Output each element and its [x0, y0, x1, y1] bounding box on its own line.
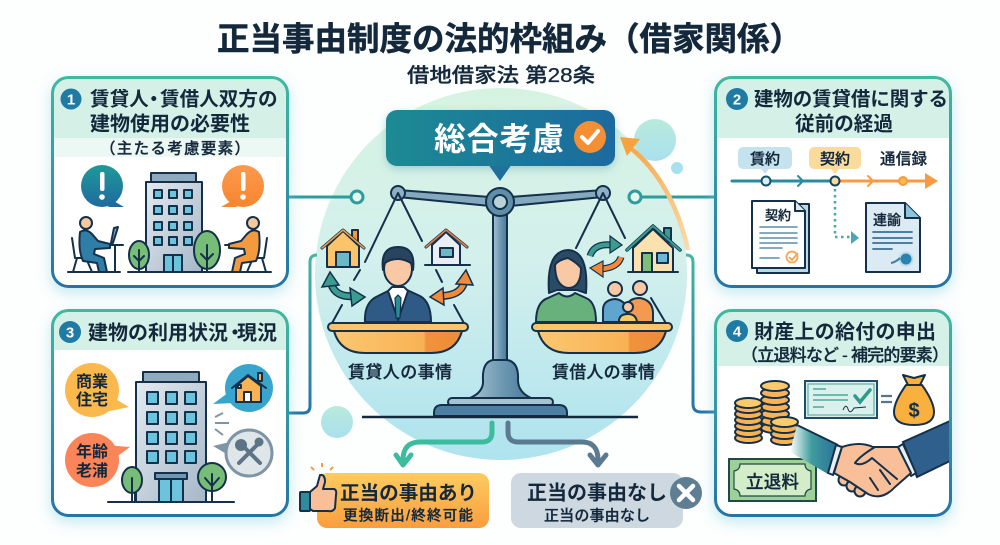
banner: comprehensive consideration [386, 110, 615, 181]
icon: white house [425, 230, 470, 265]
bubble: commercial and residential [65, 363, 129, 417]
icon: coin stacks [735, 381, 798, 445]
label: landlord circumstances: 賃貸人の事情 [348, 363, 452, 382]
arrow: green [590, 236, 622, 256]
icon: banknote: 立退料 [746, 472, 799, 492]
panel 3 heading: 建物の利用状況 [88, 322, 228, 344]
timeline tags: 賃約 [750, 151, 780, 168]
box: no legitimate reason [511, 473, 702, 528]
icon: trees [122, 463, 226, 502]
arrow: orange [590, 257, 621, 277]
timeline arrow [732, 173, 938, 189]
panel 2 heading: 従前の経過 [795, 114, 893, 136]
panel 1 heading: 賃貸人 [90, 88, 149, 110]
ground line [108, 501, 234, 503]
box: legitimate reason exists: 更換断出/終終可能 [343, 506, 474, 524]
bubble: commercial and residential: 住宅 [76, 390, 108, 409]
panel 1 heading [90, 88, 278, 136]
icon: contract document [752, 201, 809, 273]
icon: banknote [729, 459, 816, 501]
icon: orange speech bubble [221, 165, 264, 207]
document label: 連諭 [873, 212, 901, 228]
icon: family [603, 281, 653, 322]
icon: contract check [786, 252, 798, 262]
timeline tags [738, 147, 927, 174]
box: legitimate reason exists [300, 463, 489, 528]
equals sign [881, 396, 892, 402]
panel 1 subheading: （主たる考慮要素） [100, 140, 250, 158]
scale: beam [391, 186, 610, 216]
box: no legitimate reason: 正当の事由なし [544, 508, 650, 524]
icon: orange house [322, 230, 364, 267]
dotted branch arrow [835, 189, 859, 244]
icon: correspondence document [866, 203, 920, 272]
panel 1: necessity of use [51, 76, 289, 288]
badge 4: 4 [733, 324, 742, 340]
panel 2: history of lease [714, 76, 952, 288]
box: no legitimate reason: 正当の事由なし [527, 482, 667, 504]
pan bowl [532, 323, 672, 353]
icon: handshake [790, 421, 952, 496]
panel 3 heading: 現況 [237, 322, 277, 344]
icon: teal speech bubble [81, 165, 124, 207]
icon: landlord at desk [68, 217, 123, 272]
badge 3: 3 [66, 324, 74, 342]
icon: tenant at desk [225, 217, 271, 272]
bubble: tools icon [213, 430, 272, 476]
bubble: age and deterioration: 年齢 [76, 442, 108, 461]
banner: comprehensive consideration: 総合考慮 [434, 121, 564, 157]
panel 4 subheading: （立退料など - 補完的要素） [741, 346, 949, 365]
left pan: landlord [322, 230, 473, 382]
icon: thumbs up [300, 463, 336, 511]
arrow: outcome no [508, 423, 606, 465]
right pan: tenant [532, 226, 680, 382]
panel 1 heading: 建物使用の必要性 [90, 112, 250, 136]
panel 2 heading [754, 88, 948, 136]
background circle [315, 88, 687, 460]
bubble: house icon [213, 364, 273, 412]
connector: panel 2 to scale [629, 191, 714, 203]
timeline tags: 通信録 [880, 150, 927, 168]
icon: money bag [894, 375, 934, 425]
connector: panel 1 to scale [289, 191, 363, 203]
badge 2: 2 [733, 92, 741, 108]
arrow: curved orange to label [620, 137, 688, 250]
icon: money bag: $ [908, 400, 920, 422]
decorative bubbles [321, 119, 683, 438]
bubble: age and deterioration [65, 433, 130, 487]
icon: tenant woman [536, 250, 596, 322]
icon: building [136, 372, 206, 502]
document label: 契約 [765, 208, 791, 223]
icon: landlord [365, 247, 431, 322]
badge 1 [60, 88, 82, 110]
subtitle: 借地借家法 第28条 [407, 64, 595, 87]
connector: panel 3 to scale [289, 255, 317, 413]
box: legitimate reason exists: 正当の事由あり [340, 482, 477, 504]
panel 3: building usage [51, 309, 289, 517]
panel 4 heading: 財産上の給付の申出 [754, 320, 936, 344]
title: 正当事由制度の法的枠組み（借家関係） [217, 21, 802, 57]
badge 3 [59, 321, 81, 343]
bubble: age and deterioration: 老浦 [76, 461, 108, 480]
timeline tags: 契約 [820, 151, 850, 168]
bubble: commercial and residential: 商業 [76, 373, 108, 391]
icon: seal [891, 252, 912, 266]
icon: cross [670, 477, 702, 509]
ground line [128, 271, 233, 273]
panel 4: financial offer [714, 309, 952, 517]
motion dashes [215, 413, 229, 435]
badge 1: 1 [67, 92, 75, 108]
scale: strings [331, 193, 667, 325]
arrow: outcome yes [396, 423, 492, 465]
panel 1 heading: 賃借人双方の [160, 88, 278, 110]
panel 1 heading: ・ [144, 88, 164, 110]
badge 4 [726, 320, 748, 342]
arrows: green exchange [322, 272, 365, 306]
icon: green-roof house [627, 226, 680, 272]
panel 3 heading: ・ [225, 322, 245, 344]
panel 2 heading: 建物の賃貸借に関する [754, 88, 948, 110]
label: tenant circumstances: 賃借人の事情 [552, 363, 655, 382]
arrows: orange exchange [430, 270, 473, 305]
icon: building [146, 173, 202, 272]
badge 2 [726, 88, 748, 110]
icon: cheque [805, 381, 877, 418]
pan bowl [328, 323, 468, 353]
icon: trees [129, 231, 220, 272]
icon: check badge [574, 121, 606, 153]
scale: pole and base [362, 212, 638, 417]
connector: panel 4 to scale [686, 255, 714, 412]
